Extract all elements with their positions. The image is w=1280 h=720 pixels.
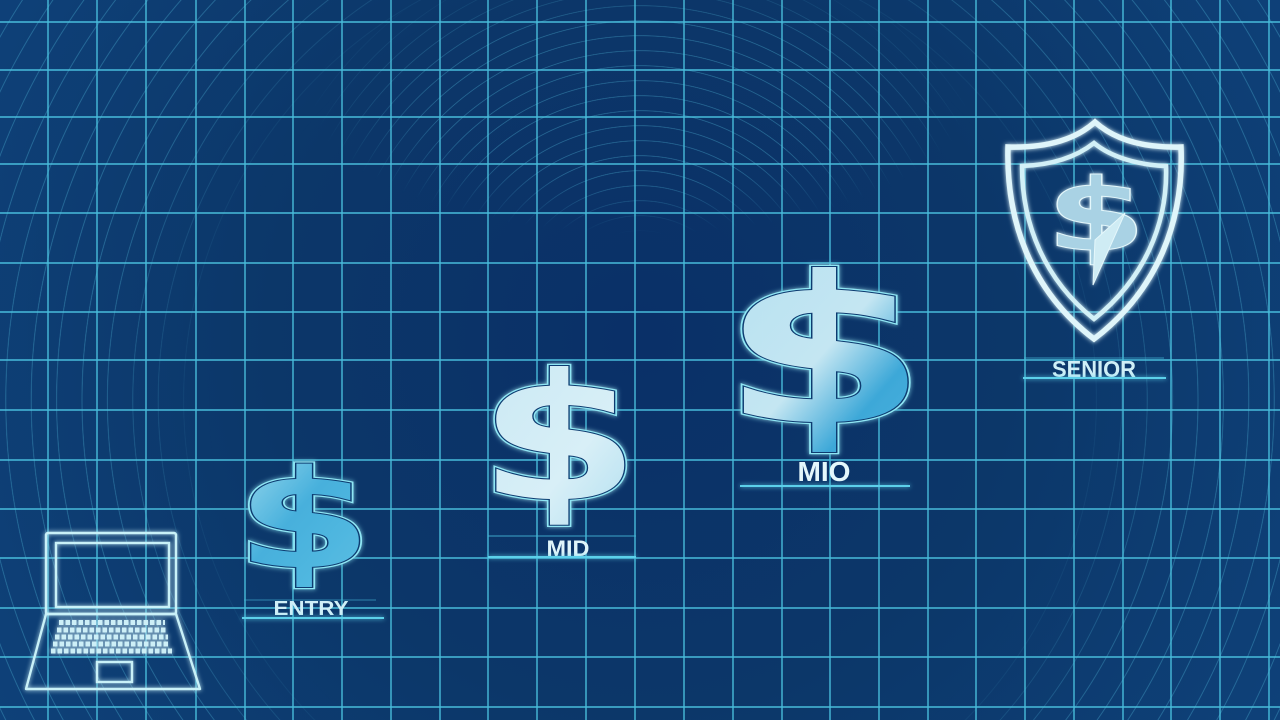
icon: small dollar, entry level: $ — [236, 441, 372, 599]
icon: large dollar, upper mid level: $ — [720, 233, 928, 471]
label: entry: ENTRY — [274, 598, 349, 620]
icon: medium dollar, mid level: $ — [478, 337, 640, 541]
icon: large dollar, upper mid level: $ — [720, 233, 928, 471]
label: upper mid: MIO — [798, 456, 850, 487]
icon: large dollar, upper mid level: $ — [720, 233, 928, 471]
label: mid: MID — [546, 536, 590, 561]
icon: medium dollar, mid level: $ — [478, 337, 640, 541]
icon: shield with dollar, senior level — [1008, 122, 1181, 339]
icon: medium dollar, mid level: $ — [478, 337, 640, 541]
icon: small dollar, entry level: $ — [236, 441, 372, 599]
concentric arcs, top centre — [332, 0, 948, 225]
icon: small dollar, entry level: $ — [236, 441, 372, 599]
keyboard keys — [51, 622, 172, 651]
icon: shield with dollar, senior level: $ — [1046, 158, 1146, 274]
icon: laptop — [26, 533, 200, 689]
label: senior: SENIOR — [1052, 356, 1136, 382]
